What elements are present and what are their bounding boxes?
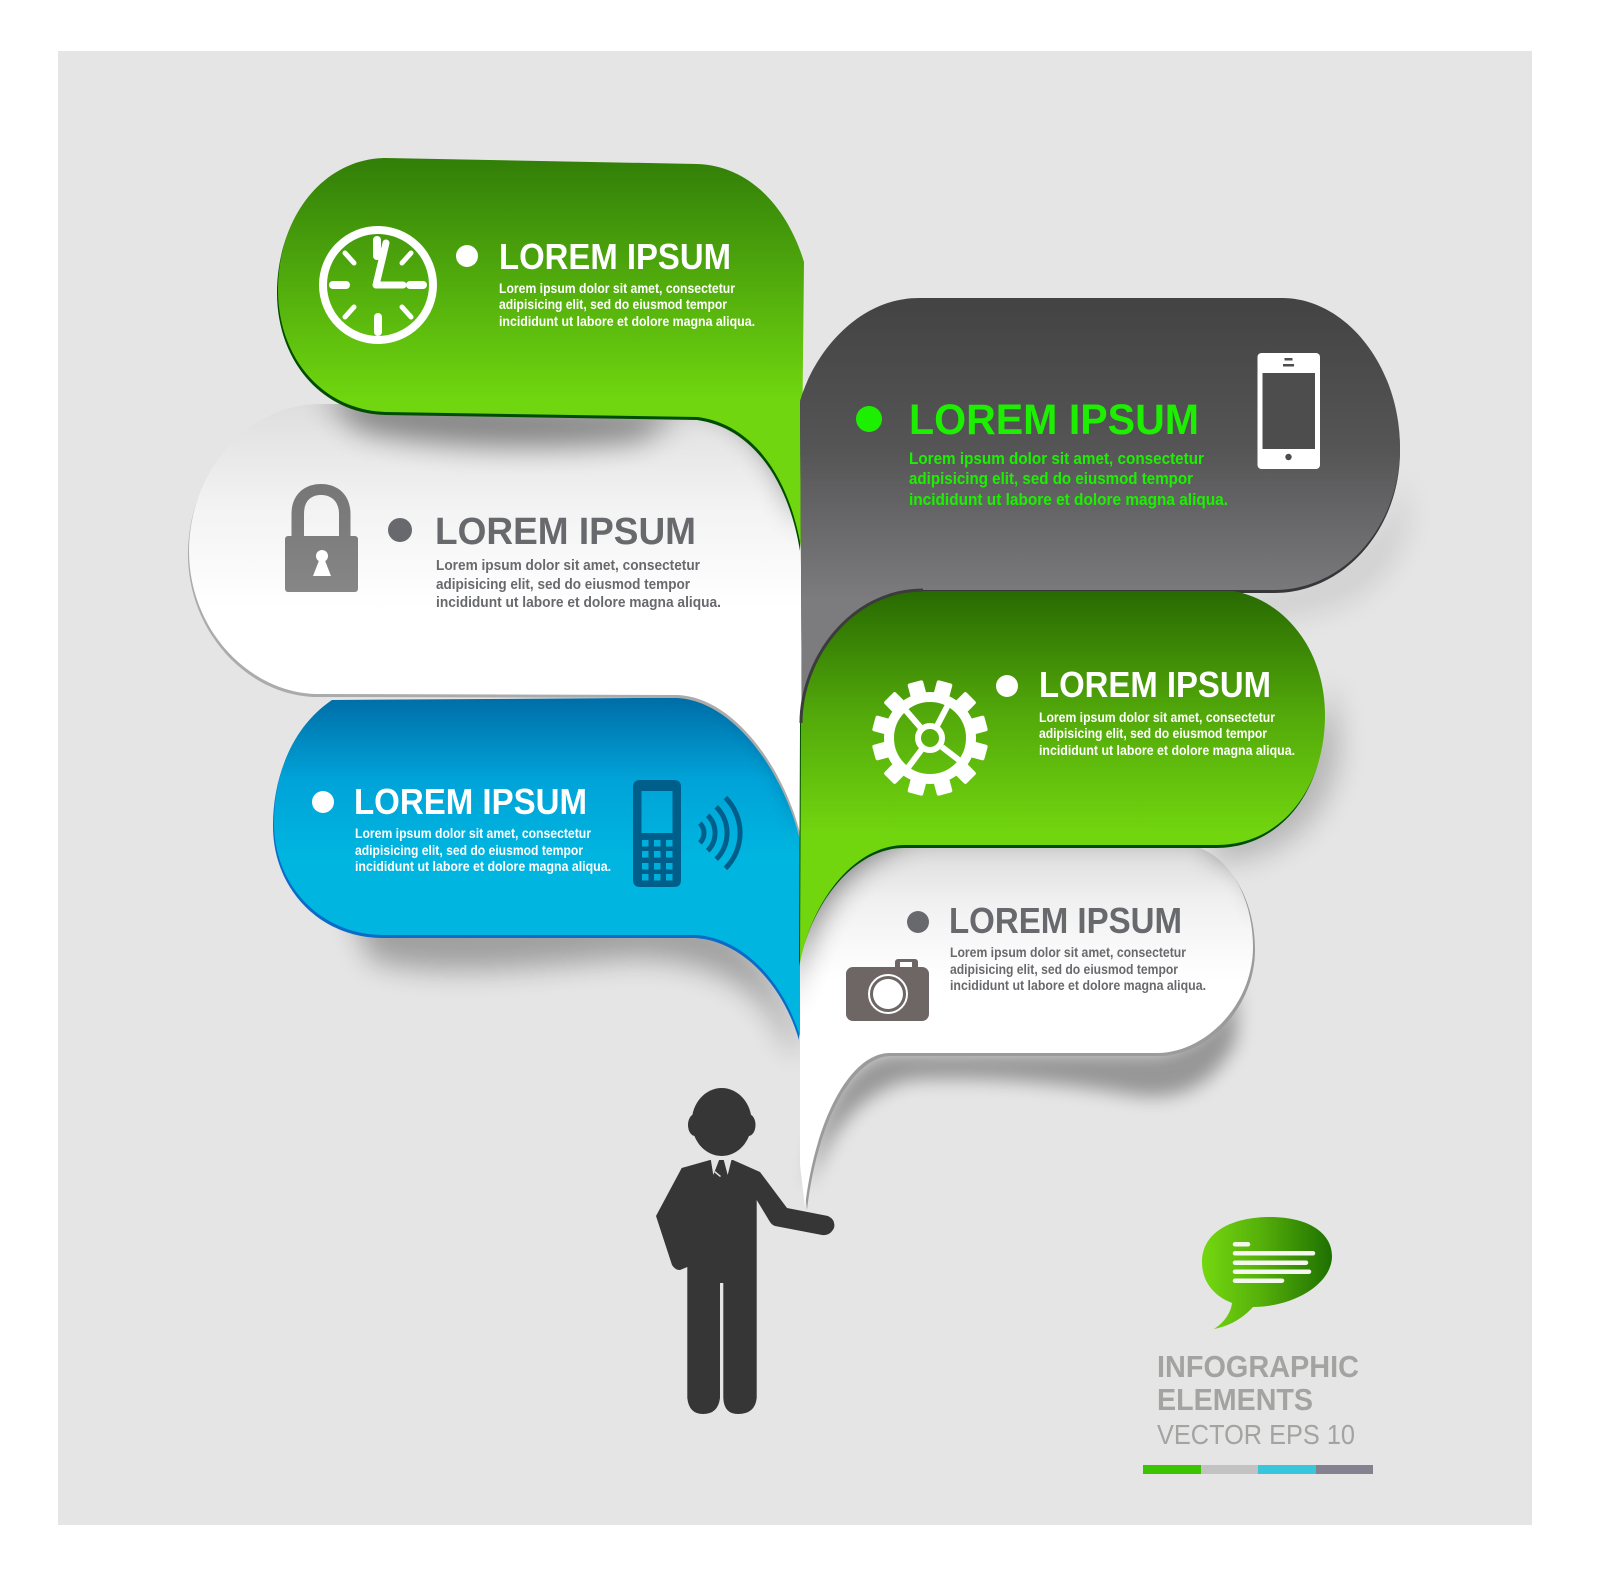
bullet dot	[312, 791, 334, 813]
body text: incididunt ut labore et dolore magna aliqua.	[909, 491, 1228, 509]
heading: LOREM IPSUM	[1039, 664, 1271, 705]
panel: green bubble with gear	[799, 590, 1340, 966]
body text	[355, 825, 611, 874]
bullet dot	[996, 675, 1018, 697]
heading: LOREM IPSUM	[499, 236, 731, 277]
body text: Lorem ipsum dolor sit amet, consectetur	[950, 944, 1186, 960]
icon: mobile phone with signal	[633, 780, 740, 887]
icon: gear	[872, 680, 988, 796]
caption: infographic elements	[1157, 1349, 1359, 1450]
icon: clock	[323, 230, 433, 340]
body text: incididunt ut labore et dolore magna aliqua.	[950, 977, 1206, 993]
body text	[499, 280, 755, 329]
body text: incididunt ut labore et dolore magna aliqua.	[436, 594, 721, 611]
caption: infographic elements: INFOGRAPHIC	[1157, 1349, 1359, 1384]
panel: blue bubble with mobile phone	[273, 680, 801, 1050]
body text: adipisicing elit, sed do eiusmod tempor	[436, 576, 690, 593]
body text: incididunt ut labore et dolore magna aliqua.	[355, 858, 611, 874]
body text: Lorem ipsum dolor sit amet, consectetur	[436, 557, 700, 574]
figure: businessman	[656, 1088, 834, 1414]
heading: LOREM IPSUM	[909, 396, 1199, 444]
colour bar	[1143, 1465, 1373, 1474]
body text: adipisicing elit, sed do eiusmod tempor	[499, 296, 727, 312]
bullet dot	[856, 406, 882, 432]
icon: camera	[846, 959, 929, 1021]
bullet dot	[907, 911, 929, 933]
heading: LOREM IPSUM	[949, 900, 1182, 941]
bullet dot	[456, 245, 478, 267]
heading: LOREM IPSUM	[435, 511, 696, 553]
body text: adipisicing elit, sed do eiusmod tempor	[355, 842, 583, 858]
caption: infographic elements: VECTOR EPS 10	[1157, 1419, 1355, 1450]
heading: LOREM IPSUM	[354, 781, 587, 822]
panel: dark bubble with smartphone	[800, 298, 1408, 733]
panel: white bubble with camera	[800, 848, 1255, 1210]
body text	[436, 557, 721, 611]
body text: Lorem ipsum dolor sit amet, consectetur	[1039, 709, 1275, 725]
body text	[1039, 709, 1295, 758]
body text: Lorem ipsum dolor sit amet, consectetur	[499, 280, 735, 296]
body text	[950, 944, 1206, 993]
body text: incididunt ut labore et dolore magna aliqua.	[1039, 742, 1295, 758]
body text: Lorem ipsum dolor sit amet, consectetur	[355, 825, 591, 841]
body text: adipisicing elit, sed do eiusmod tempor	[1039, 725, 1267, 741]
body text: adipisicing elit, sed do eiusmod tempor	[950, 961, 1178, 977]
body text	[909, 450, 1228, 509]
body text: adipisicing elit, sed do eiusmod tempor	[909, 470, 1194, 488]
icon: smartphone	[1258, 353, 1320, 469]
panel: white bubble with lock	[188, 395, 815, 840]
icon: green speech bubble	[1202, 1217, 1332, 1329]
bullet dot	[388, 518, 412, 542]
panel: green bubble with clock	[277, 158, 804, 551]
body text: incididunt ut labore et dolore magna aliqua.	[499, 313, 755, 329]
body text: Lorem ipsum dolor sit amet, consectetur	[909, 450, 1205, 468]
icon: padlock	[285, 484, 358, 592]
caption: infographic elements: ELEMENTS	[1157, 1382, 1313, 1417]
